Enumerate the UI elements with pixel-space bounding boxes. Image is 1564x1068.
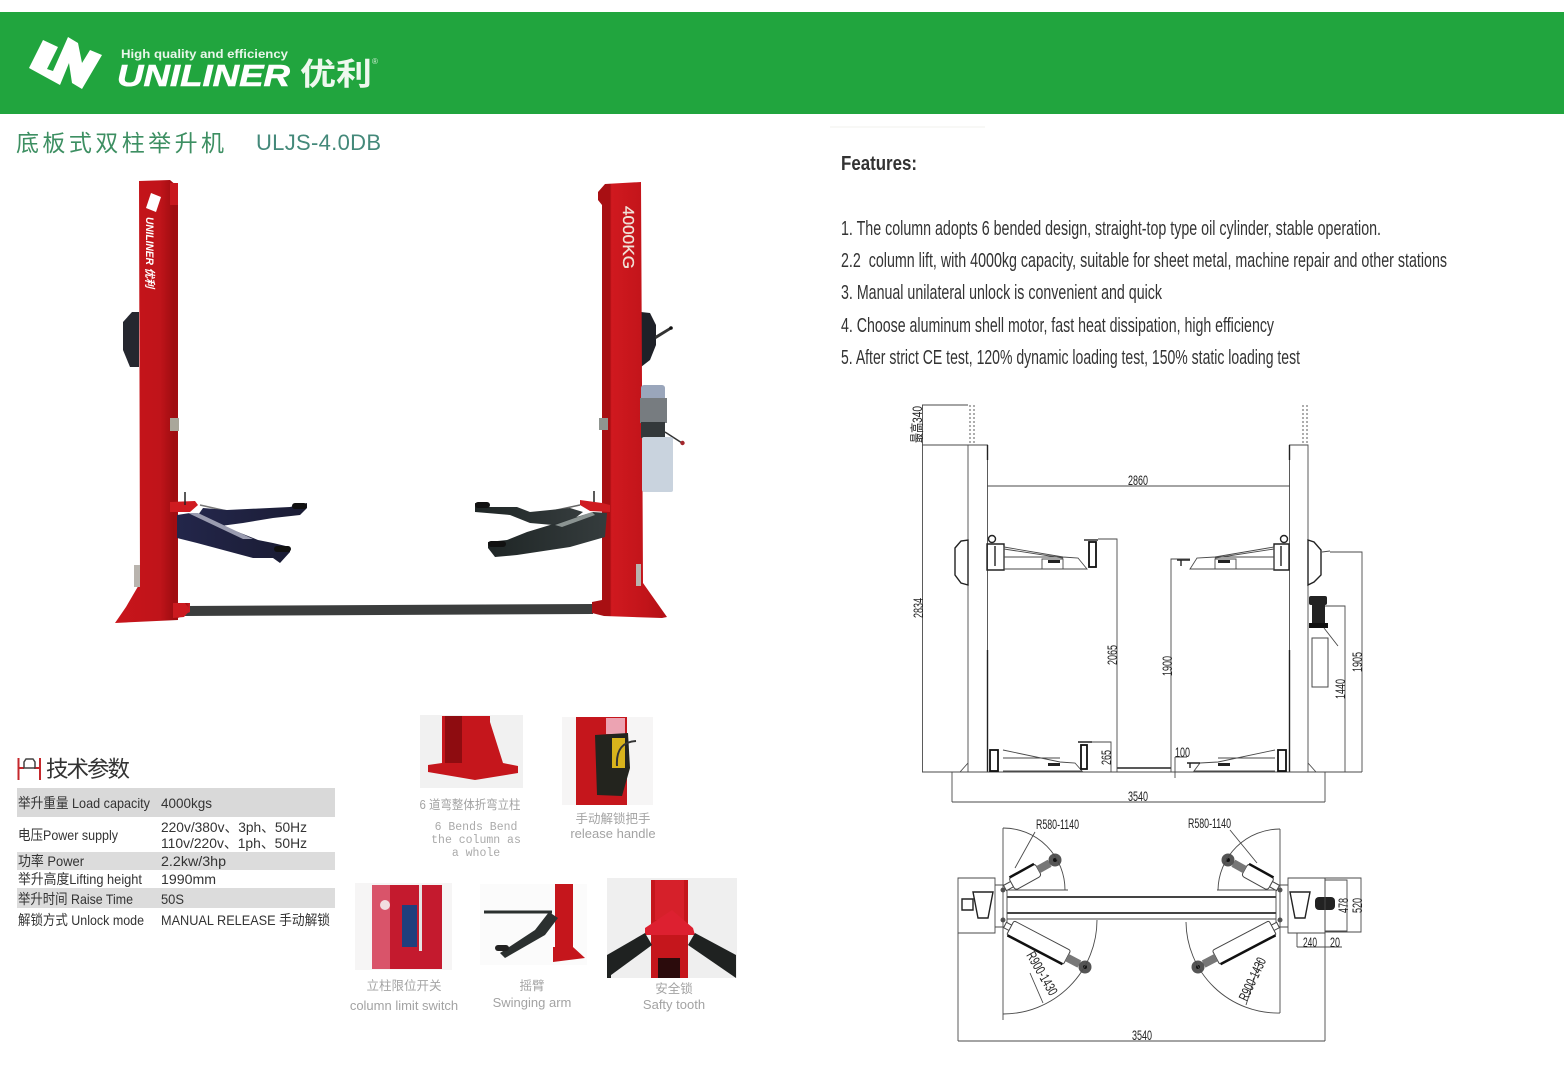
detail: six bend column: 6 道弯整体折弯立柱 (420, 797, 520, 812)
left lifting arms (170, 492, 307, 563)
spec table: 解锁方式 Unlock mode (18, 912, 144, 928)
left swing arms (1001, 854, 1092, 974)
detail: release handle (562, 717, 656, 841)
spec table: 50S (161, 891, 184, 907)
detail: safety tooth: 安全锁 (655, 981, 693, 996)
product photo: two post lift (115, 180, 685, 623)
detail: release handle: 手动解锁把手 (575, 811, 651, 826)
detail: column limit switch: column limit switch (350, 998, 458, 1013)
product title (16, 130, 381, 156)
spec table: 功率 Power (18, 853, 84, 869)
logo mark (29, 37, 102, 89)
detail: six bend column: the column as (431, 834, 521, 847)
spec table: 举升时间 Raise Time (18, 891, 133, 907)
plan view labels: 3540 (1132, 1027, 1152, 1043)
registered mark: ® (372, 57, 378, 66)
icon: lift (18, 758, 40, 780)
logo wordmark: UNILINER (117, 58, 291, 93)
features heading: Features: (841, 153, 917, 175)
features list: 3. Manual unilateral unlock is convenient and quick (841, 282, 1163, 304)
detail: release handle: release handle (570, 826, 656, 841)
header banner (0, 12, 1564, 114)
spec table: 110v/220v、1ph、50Hz (161, 835, 307, 851)
dimension labels: 最高340 (909, 406, 925, 443)
left column: UNILINER 优利 (143, 217, 156, 290)
spec table: 1990mm (161, 871, 216, 887)
detail: column limit switch (350, 883, 458, 1013)
power unit (1309, 551, 1338, 687)
plan view labels: 20 (1330, 934, 1340, 950)
features list: 4. Choose aluminum shell motor, fast heat dissipation, high efficiency (841, 315, 1274, 337)
front elevation drawing (909, 405, 1365, 804)
plan view labels (1023, 815, 1365, 1043)
lower arms (990, 742, 1286, 771)
logo tagline: High quality and efficiency (121, 47, 288, 61)
features block (830, 127, 1447, 369)
section heading: 技术参数 (46, 757, 130, 782)
dimension labels: 1440 (1332, 679, 1348, 699)
plan view labels: R580-1140 (1188, 815, 1231, 831)
detail: swinging arm (480, 884, 587, 1010)
swing arcs and dimension lines (958, 828, 1361, 1041)
dimension labels (909, 406, 1365, 804)
spec table: MANUAL RELEASE 手动解锁 (161, 912, 330, 928)
right upper arm (1177, 536, 1321, 585)
plan view labels: R900-1430 (1235, 955, 1269, 1003)
detail: column limit switch: 立柱限位开关 (366, 978, 442, 993)
dimension labels: 1900 (1159, 656, 1175, 676)
spec table: 2.2kw/3hp (161, 853, 226, 869)
right lifting arms (475, 491, 610, 557)
plan view drawing (958, 815, 1365, 1043)
detail: six bend column: a whole (452, 847, 500, 860)
dimension lines (952, 486, 1362, 802)
detail: six bend column: 6 Bends Bend (435, 821, 517, 834)
detail: safety tooth: Safty tooth (643, 997, 705, 1012)
spec table: 举升高度Lifting height (18, 871, 142, 887)
dimension labels: 2834 (910, 598, 926, 618)
columns and base (922, 405, 1362, 772)
right swing arms (1192, 854, 1282, 974)
dimension labels: 3540 (1128, 788, 1148, 804)
plan view labels: R580-1140 (1036, 816, 1079, 832)
dimension labels: 2065 (1104, 645, 1120, 665)
spec table: 举升重量 Load capacity (18, 795, 150, 811)
product title: 底板式双柱举升机 (16, 130, 224, 156)
detail: swinging arm: 摇臂 (519, 979, 545, 993)
dimension labels: 265 (1098, 750, 1114, 765)
detail: swinging arm: Swinging arm (493, 995, 571, 1010)
spec table: 电压Power supply (18, 827, 118, 843)
plan view labels: R900-1430 (1023, 948, 1061, 998)
right column (592, 182, 673, 618)
detail: safety tooth (607, 878, 737, 1012)
spec section (17, 757, 335, 928)
logo chinese name: 优利 (300, 57, 372, 92)
dimension labels: 1905 (1349, 652, 1365, 672)
dimension labels: 2860 (1128, 472, 1148, 488)
spec table: 220v/380v、3ph、50Hz (161, 819, 307, 835)
product title: ULJS-4.0DB (256, 130, 381, 155)
spec table: 4000kgs (161, 795, 212, 811)
hydraulic power unit (640, 385, 685, 492)
left upper arm (955, 536, 1098, 585)
detail: six bend column (420, 715, 523, 860)
features list: 5. After strict CE test, 120% dynamic loading test, 150% static loading test (841, 347, 1300, 369)
floor plate (185, 604, 593, 616)
features list (841, 218, 1447, 369)
plan view labels: 240 (1303, 934, 1317, 950)
spec table (17, 788, 335, 928)
plan view labels: 520 (1349, 898, 1365, 913)
base plates and beam (958, 878, 1335, 933)
plan view labels: 478 (1335, 898, 1351, 913)
right column: 4000KG (619, 206, 636, 269)
left column (115, 180, 190, 623)
dimension labels: 100 (1175, 744, 1190, 760)
